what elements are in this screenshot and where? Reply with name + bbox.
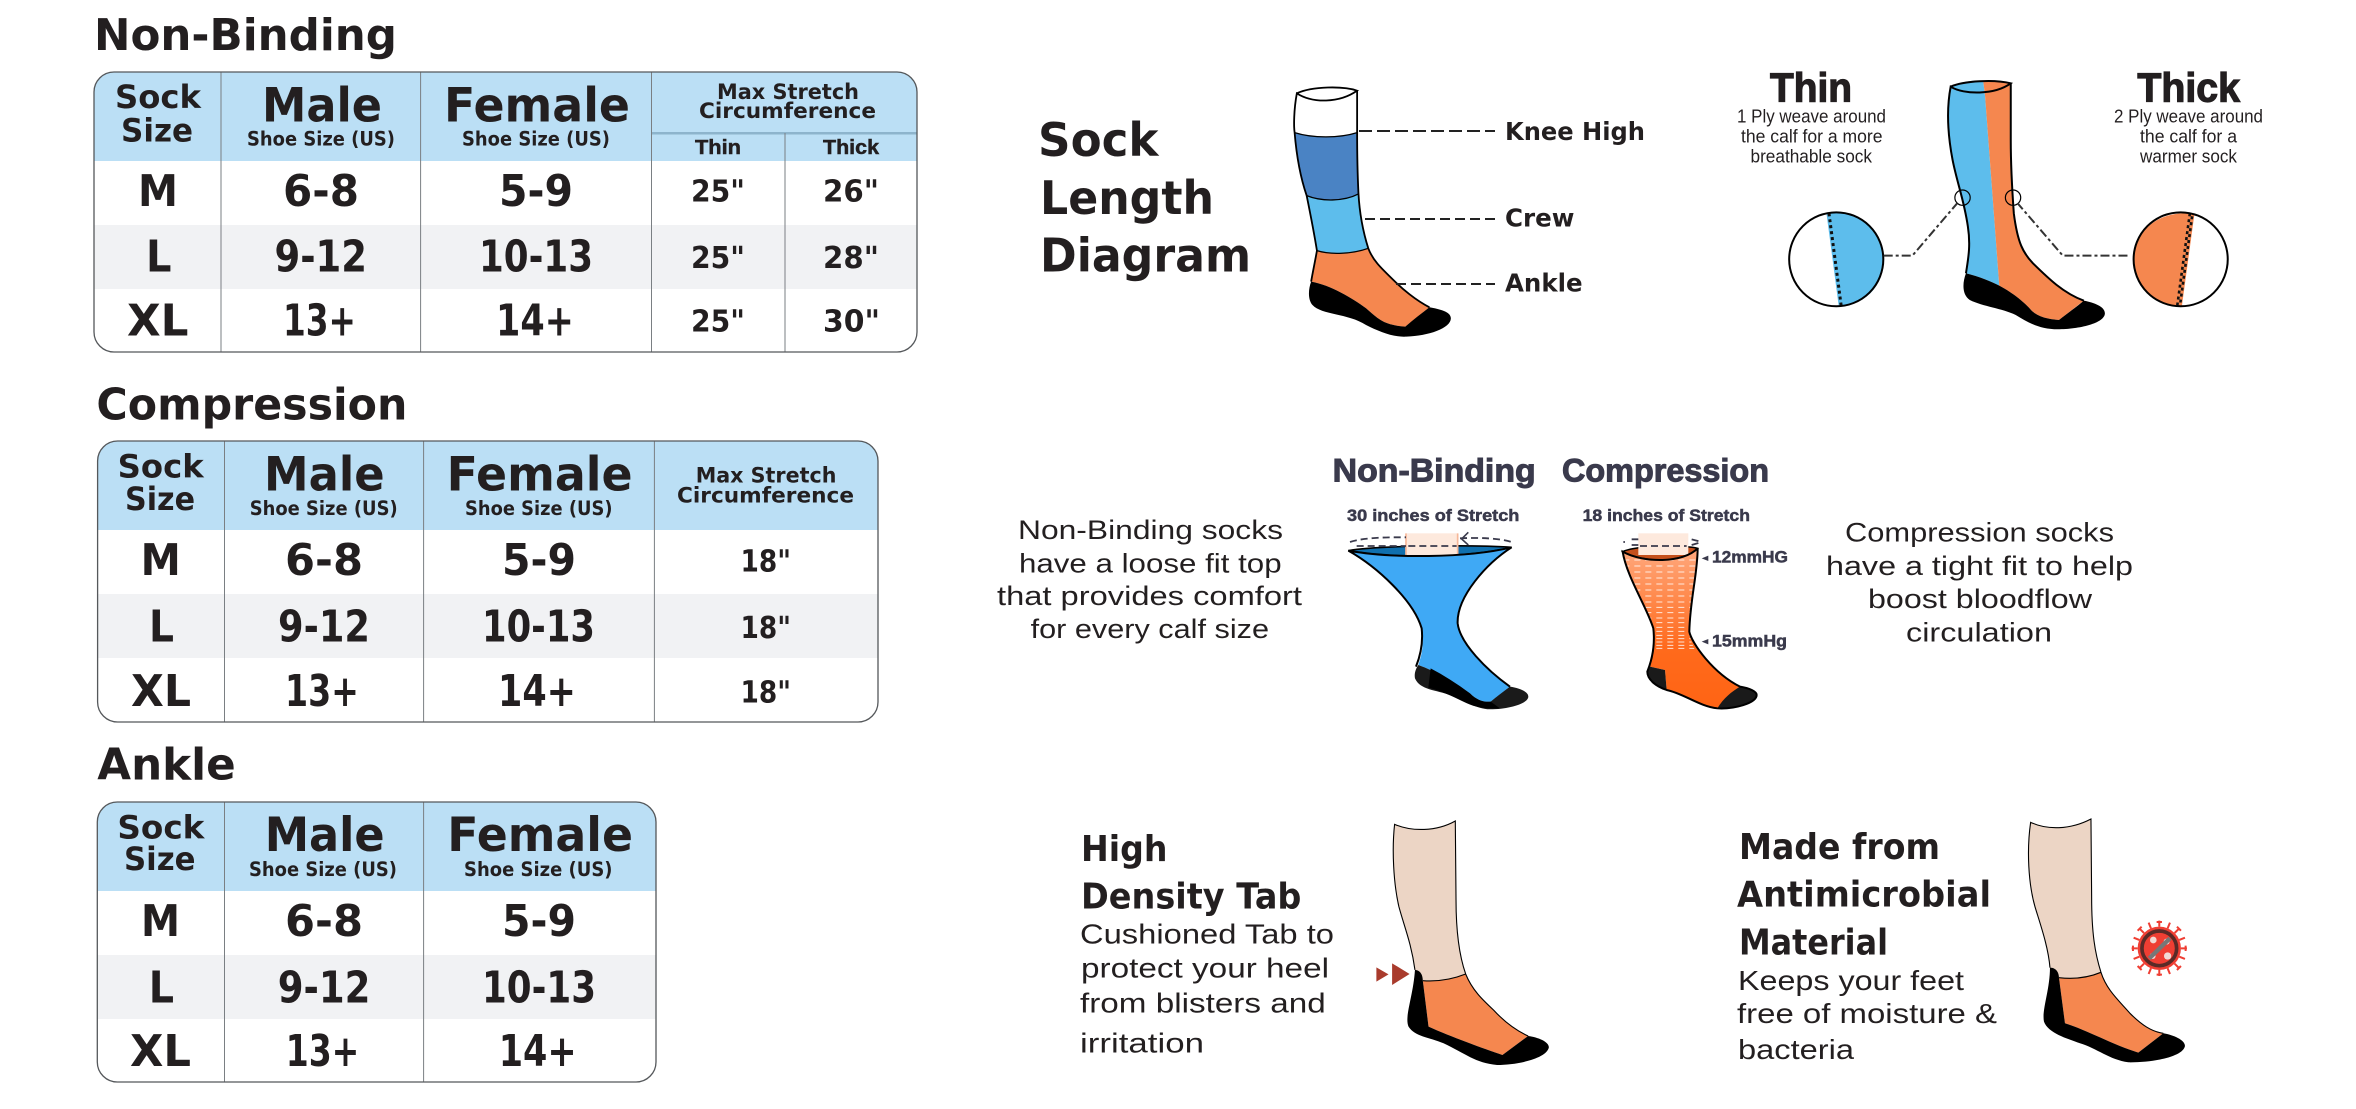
header row: Shoe Size (US) — [247, 128, 395, 151]
detail circle: thin weave — [1789, 212, 1884, 306]
text: Thin: breathable sock — [1750, 146, 1873, 167]
icon: heel tab sock — [1376, 821, 1549, 1065]
row L: 28" — [823, 241, 879, 276]
callout: Crew: Crew — [1505, 204, 1574, 233]
header row — [118, 448, 854, 520]
header row: Shoe Size (US) — [462, 128, 610, 151]
header row: Thin — [695, 137, 741, 159]
text: Made from Antimicrobial Material: bacteria — [1738, 1034, 1854, 1065]
row XL — [131, 666, 791, 717]
text: Thin: Thin — [1770, 65, 1852, 111]
row L: 18" — [740, 611, 791, 646]
row XL: 18" — [740, 676, 791, 711]
row L — [149, 963, 596, 1014]
heading: Compression sock: Compression — [1562, 453, 1769, 489]
text: Compression description: boost bloodflow — [1868, 584, 2093, 614]
icon: thin and thick sock with weave details — [1789, 80, 2228, 329]
row L: L — [146, 232, 172, 283]
row L: 10-13 — [479, 232, 593, 283]
row XL: XL — [130, 1026, 191, 1077]
text: Compression description — [1826, 518, 2133, 648]
text: High Density Tab: from blisters and — [1080, 987, 1326, 1018]
header row: Size — [124, 840, 196, 878]
header row: Thick — [823, 137, 880, 159]
text: Non-Binding description: for every calf size — [1031, 614, 1269, 644]
header row: Female — [447, 448, 633, 503]
heading: Non-Binding sock: Non-Binding — [1333, 453, 1536, 489]
row XL: 14+ — [498, 666, 576, 717]
row M: 5-9 — [502, 896, 576, 947]
row M: 26" — [823, 175, 879, 210]
row M — [141, 896, 576, 947]
text: Compression description: have a tight fit to help — [1826, 551, 2133, 581]
text: Thick: 2 Ply weave around — [2114, 105, 2263, 126]
text: High Density Tab: High — [1081, 829, 1168, 870]
arrows: heel marker — [1376, 963, 1410, 985]
row L: 10-13 — [482, 963, 596, 1014]
header row: Sock — [115, 78, 202, 116]
table: Non-Binding size chart — [94, 72, 918, 352]
header row: Shoe Size (US) — [250, 497, 398, 520]
detail circle: thick weave — [2134, 212, 2228, 306]
row M: 6-8 — [285, 896, 363, 947]
header row: Size — [125, 480, 195, 518]
row XL: 14+ — [496, 296, 574, 347]
header row: Male — [262, 79, 382, 134]
title: Sock Length Diagram — [1038, 113, 1251, 283]
header row — [115, 78, 880, 159]
text: Made from Antimicrobial Material: free of moisture & — [1737, 998, 1997, 1029]
row M: M — [141, 535, 181, 586]
text: Thick: warmer sock — [2139, 146, 2238, 167]
callout: Knee High: Knee High — [1505, 117, 1645, 146]
header row: Male — [265, 808, 385, 863]
row M — [138, 166, 879, 217]
text: High Density Tab: Density Tab — [1081, 876, 1301, 917]
connector: thin — [1884, 203, 1957, 256]
row L: 9-12 — [278, 602, 370, 653]
callout: Ankle: Ankle — [1505, 269, 1583, 298]
row L — [146, 232, 879, 283]
row XL — [127, 296, 880, 347]
row M: 5-9 — [499, 166, 573, 217]
text: Non-Binding description — [997, 515, 1303, 644]
heading: Compression: Compression — [96, 379, 407, 430]
row L: 9-12 — [278, 963, 370, 1014]
text: Made from Antimicrobial Material — [1737, 827, 1997, 1065]
header row: Female — [447, 808, 633, 863]
row L: 10-13 — [482, 602, 595, 653]
row XL: 13+ — [286, 1026, 359, 1077]
text: Made from Antimicrobial Material: Keeps your feet — [1738, 965, 1964, 996]
label: 18 inches of Stretch: 18 inches of Stretch — [1583, 506, 1750, 525]
row M: 18" — [740, 545, 791, 580]
row XL: 13+ — [283, 296, 356, 347]
icon: antimicrobial sock — [2028, 819, 2187, 1062]
heading: Ankle: Ankle — [97, 739, 236, 790]
row L: L — [149, 602, 174, 653]
title: Sock Length Diagram: Diagram — [1040, 229, 1251, 283]
header row: Sock — [117, 808, 205, 846]
icon: no bacteria badge — [2132, 921, 2187, 976]
row XL — [130, 1026, 577, 1077]
header row: Shoe Size (US) — [464, 858, 612, 881]
title: Sock Length Diagram: Sock — [1038, 113, 1160, 167]
text: Made from Antimicrobial Material: Antimicrobial — [1737, 875, 1991, 916]
sock: half thin half thick — [1948, 80, 2105, 329]
text: High Density Tab: Cushioned Tab to — [1080, 918, 1334, 949]
text: High Density Tab: protect your heel — [1081, 953, 1329, 984]
row M: M — [138, 166, 178, 217]
table: Compression size chart — [98, 441, 879, 722]
row L: 25" — [691, 241, 745, 276]
row XL: 13+ — [285, 666, 359, 717]
row L — [149, 602, 791, 653]
text: Thin — [1737, 65, 1886, 167]
header row: Circumference — [699, 99, 876, 123]
row M — [141, 535, 791, 586]
header row: Shoe Size (US) — [465, 497, 612, 520]
header row: Size — [121, 112, 193, 150]
row L: 9-12 — [274, 232, 367, 283]
row XL: 25" — [691, 305, 745, 340]
text: Thick: Thick — [2137, 65, 2240, 111]
header row: Max Stretch — [717, 80, 859, 104]
row L: L — [149, 963, 174, 1014]
table: Ankle size chart — [97, 802, 656, 1082]
icon: compression sock — [1623, 533, 1757, 708]
text: Made from Antimicrobial Material: Made from — [1739, 827, 1940, 868]
label: 30 inches of Stretch: 30 inches of Stretch — [1347, 506, 1519, 525]
icon: non-binding sock — [1348, 532, 1528, 709]
row M: 25" — [691, 175, 745, 210]
text: Non-Binding description: have a loose fit top — [1019, 548, 1282, 578]
row M: 6-8 — [283, 166, 359, 217]
row XL: 30" — [823, 305, 880, 340]
text: Compression description: circulation — [1906, 618, 2052, 648]
header row — [117, 808, 633, 881]
row M: 5-9 — [502, 535, 576, 586]
text: Thick — [2114, 65, 2263, 167]
heading: Non-Binding: Non-Binding — [94, 10, 397, 61]
text: High Density Tab: irritation — [1080, 1027, 1204, 1058]
text: Thick: the calf for a — [2140, 126, 2238, 147]
row XL: XL — [127, 296, 188, 347]
text: Compression description: Compression socks — [1845, 518, 2114, 548]
label: 12mmHG: 12mmHG — [1712, 548, 1788, 567]
text: Thin: 1 Ply weave around — [1737, 105, 1886, 126]
row M: M — [141, 896, 180, 947]
label: 15mmHg: 15mmHg — [1712, 632, 1787, 651]
text: Non-Binding description: that provides comfort — [997, 581, 1303, 611]
header row: Max Stretch — [696, 464, 836, 488]
header row: Female — [444, 79, 630, 134]
text: Thin: the calf for a more — [1741, 126, 1882, 147]
row XL: XL — [131, 666, 191, 717]
connector: thick — [2018, 203, 2127, 256]
header row: Shoe Size (US) — [249, 858, 397, 881]
row XL: 14+ — [499, 1026, 577, 1077]
title: Sock Length Diagram: Length — [1040, 171, 1214, 225]
header row: Male — [264, 448, 385, 503]
header row: Sock — [118, 448, 204, 486]
text: High Density Tab — [1080, 829, 1334, 1058]
header row: Circumference — [677, 484, 854, 508]
text: Non-Binding description: Non-Binding socks — [1018, 515, 1283, 545]
text: Made from Antimicrobial Material: Material — [1739, 923, 1888, 964]
icon: sock length diagram — [1294, 87, 1451, 337]
row M: 6-8 — [285, 535, 363, 586]
